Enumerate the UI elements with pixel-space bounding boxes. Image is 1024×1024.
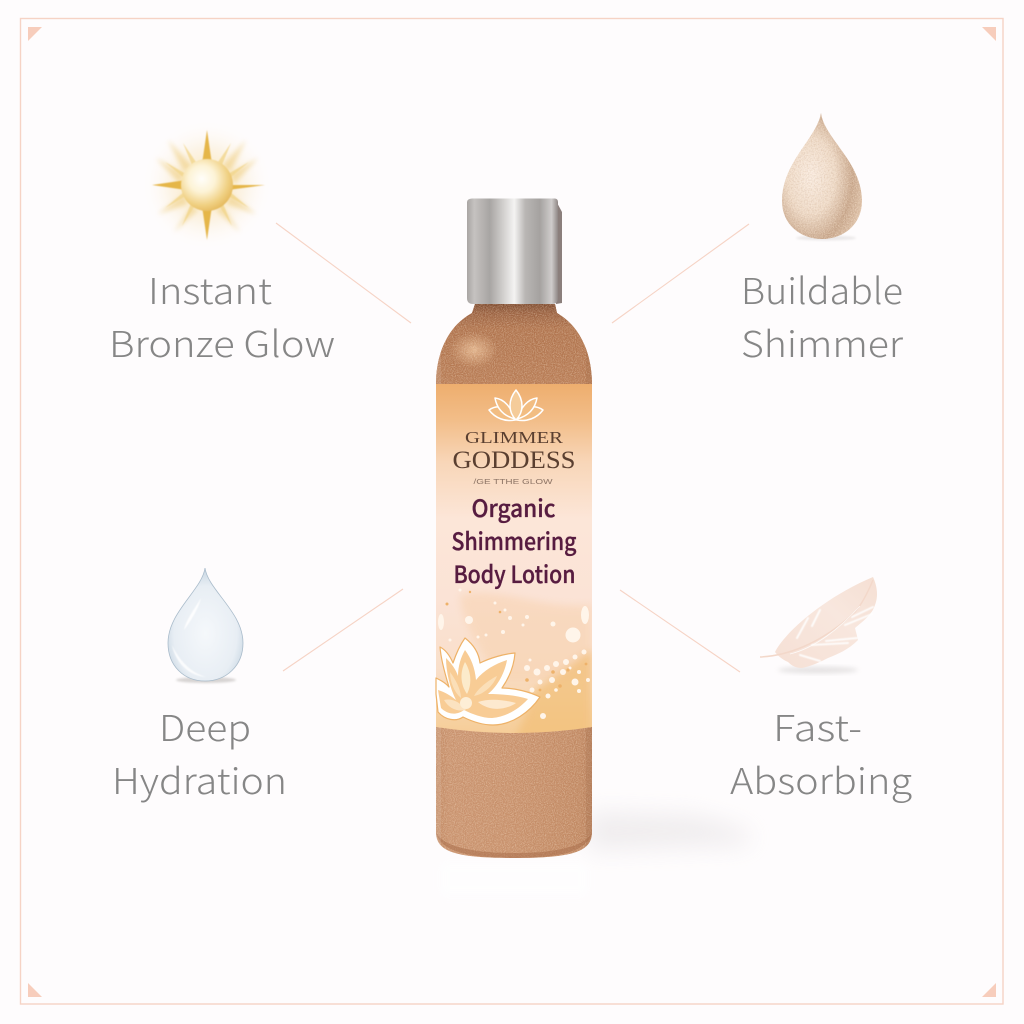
bottle reflection [440,862,588,896]
label: deep hydration: Hydration [112,753,287,805]
brand name: /GE TTHE GLOW [474,477,554,486]
label: buildable shimmer: Shimmer [741,316,904,368]
label: instant bronze glow: Instant [148,263,272,315]
product name: Shimmering [452,522,577,557]
bottle body [436,304,592,858]
label: fast-absorbing [730,700,912,805]
label: deep hydration: Deep [159,700,251,752]
corner accent top left [28,27,42,41]
corner accent bottom left [28,983,42,997]
product label [436,384,592,740]
connector: buildable shimmer [612,224,749,323]
brand name [452,428,576,486]
product name [452,489,577,590]
corner accent top right [982,27,996,41]
icon: feather [760,577,877,674]
label: buildable shimmer [741,263,904,368]
connector: fast-absorbing [620,590,740,672]
connector: deep hydration [283,589,403,671]
watercolor wash [460,593,592,680]
brand name: GODDESS [452,447,576,474]
brand name: GLIMMER [465,428,564,447]
icon: beige shimmer drop [780,110,865,242]
product name: Organic [472,489,556,524]
icon: water drop [168,568,243,683]
label: fast-absorbing: Fast- [773,700,862,752]
large lotus emblem [436,638,540,725]
glitter bubbles [438,588,590,719]
label: deep hydration [112,700,287,805]
product bottle [430,198,600,865]
label: instant bronze glow: Bronze Glow [109,316,335,368]
corner accent bottom right [982,983,996,997]
bottle cast shadow [588,812,752,850]
icon: golden sun sparkle [141,119,273,251]
label: instant bronze glow [109,263,335,368]
connector: instant bronze glow [276,223,411,323]
small lotus logo [489,390,543,421]
product name: Body Lotion [454,555,576,590]
label: fast-absorbing: Absorbing [730,753,912,805]
metallic cap [467,198,562,304]
label: buildable shimmer: Buildable [741,263,903,315]
